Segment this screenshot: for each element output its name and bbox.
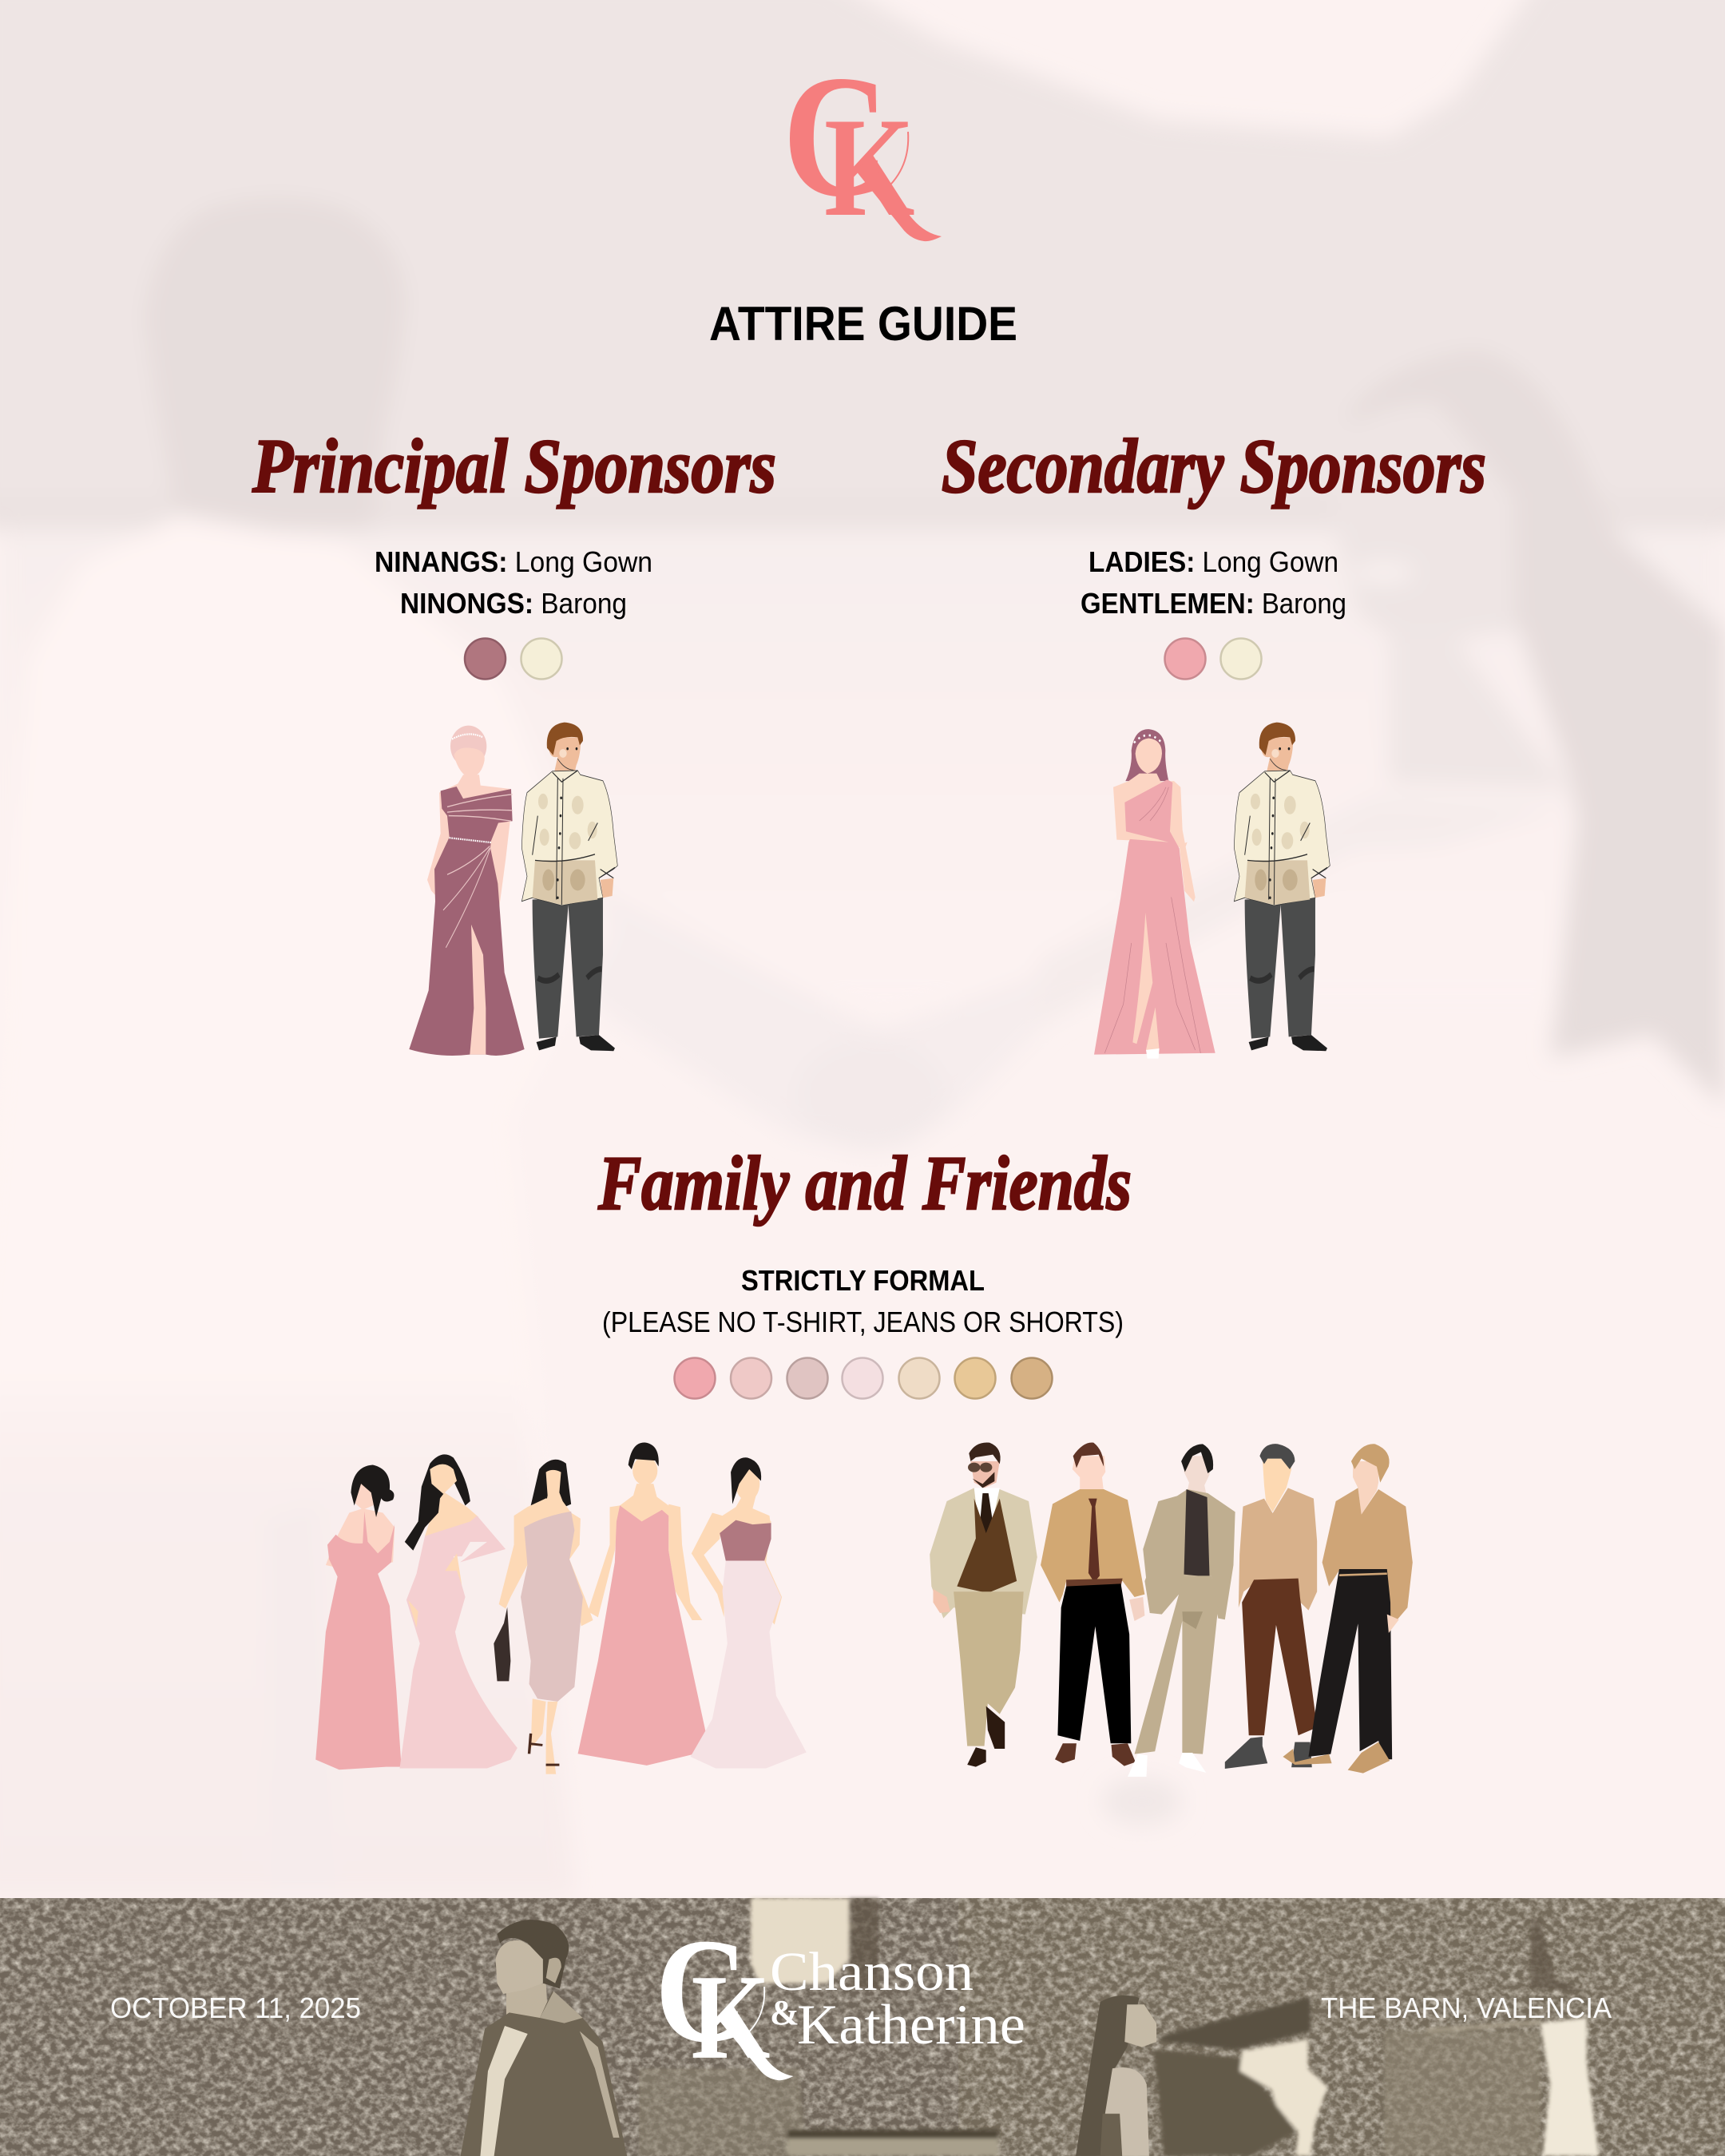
stone wall and windows [639, 1898, 1599, 2156]
footer couple names: Chanson [770, 1941, 974, 2002]
lady 1 [315, 1465, 402, 1770]
lady 2 [399, 1454, 518, 1768]
colour swatches: family and friends [674, 1357, 1053, 1399]
man 2 [1041, 1443, 1144, 1766]
figure: man in barong, principal sponsors [521, 723, 617, 1051]
text: secondary sponsors attire [1081, 545, 1346, 620]
figure: lady in mauve gown [409, 726, 525, 1056]
text: strictly formal note: STRICTLY FORMAL [741, 1264, 985, 1297]
man 5 [1283, 1444, 1413, 1774]
text: principal sponsors attire [375, 545, 652, 620]
figure: lady in pink gown [1094, 729, 1215, 1059]
logo monogram CK [783, 39, 942, 246]
lady 4 [578, 1442, 708, 1766]
footer couple names: & [770, 1993, 799, 2032]
footer band: photo of couple on vine wall [0, 1898, 1725, 2156]
text: secondary sponsors attire: LADIES: Long Gown [1089, 545, 1338, 578]
figures: five men in formal wear [930, 1442, 1413, 1777]
logo monogram CK: K [824, 89, 915, 246]
man 4 [1225, 1444, 1317, 1769]
heading: Principal Sponsors: Principal Sponsors [252, 423, 776, 509]
footer logo monogram CK: C [655, 1908, 748, 2073]
lady 5 [691, 1457, 807, 1768]
footer couple names: Katherine [797, 1994, 1025, 2056]
man 1 [930, 1442, 1037, 1767]
figures: five ladies in gowns [315, 1442, 807, 1774]
heading: Secondary Sponsors: Secondary Sponsors [942, 423, 1486, 509]
text: strictly formal note: (PLEASE NO T-SHIRT, JEANS OR SHORTS) [602, 1306, 1124, 1338]
figure: man in barong, secondary sponsors [1234, 723, 1330, 1051]
title: ATTIRE GUIDE [709, 297, 1017, 351]
colour swatches: principal sponsors [465, 639, 562, 679]
footer logo monogram CK [655, 1908, 794, 2085]
text: secondary sponsors attire: GENTLEMEN: Barong [1081, 587, 1346, 620]
footer couple names [770, 1941, 1025, 2056]
text: principal sponsors attire: NINANGS: Long Gown [375, 545, 652, 578]
footer date: OCTOBER 11, 2025 [110, 1992, 361, 2024]
text: strictly formal note [602, 1264, 1124, 1338]
colour swatches: secondary sponsors [1164, 639, 1262, 679]
woman with long hair [1076, 1995, 1156, 2156]
footer venue: THE BARN, VALENCIA [1321, 1992, 1612, 2024]
footer logo monogram CK: K [692, 1950, 770, 2085]
man 3 [1128, 1444, 1235, 1777]
man in jacket [461, 1920, 627, 2156]
heading: Family and Friends: Family and Friends [597, 1140, 1132, 1226]
text: principal sponsors attire: NINONGS: Barong [400, 587, 627, 620]
lady 3 [494, 1460, 593, 1774]
logo monogram CK: C [783, 39, 889, 233]
